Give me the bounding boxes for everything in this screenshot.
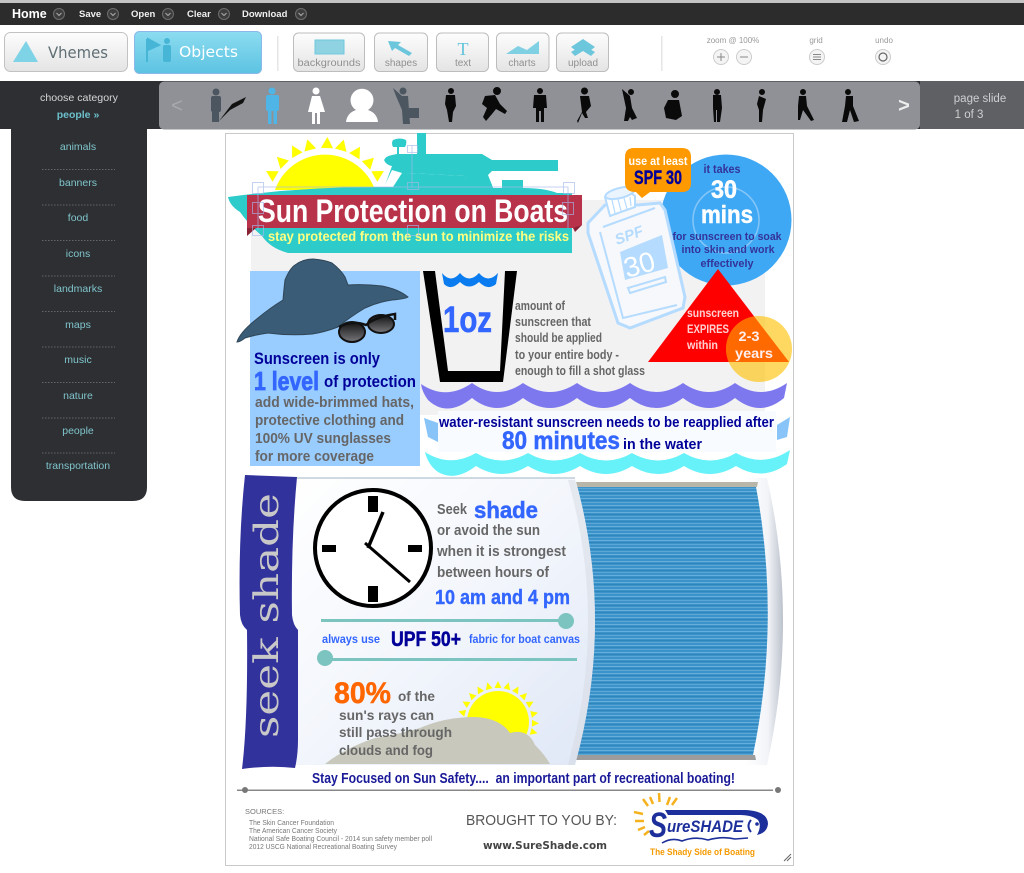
zoom grid undo controls: grid bbox=[809, 36, 823, 45]
panel: expiry triangle: EXPIRES bbox=[687, 322, 729, 336]
panel: sunscreen level: Sunscreen is only bbox=[254, 349, 380, 368]
panel: thirty minutes circle: into skin and work bbox=[682, 244, 775, 256]
closing message: Stay Focused on Sun Safety.... an important part of recreational boating! bbox=[312, 771, 735, 787]
SureShade logo: ureSHADE bbox=[667, 817, 744, 836]
category sidebar: landmarks bbox=[54, 283, 102, 295]
category strip: > bbox=[898, 95, 910, 117]
zoom grid undo controls: zoom @ 100% bbox=[707, 36, 759, 45]
category sidebar: music bbox=[64, 354, 92, 366]
panel: sunscreen level: 100% UV sunglasses bbox=[255, 430, 391, 447]
selection handles bbox=[252, 146, 574, 236]
purple wave bbox=[421, 383, 787, 409]
slider top bbox=[321, 613, 574, 629]
panel: one ounce shot glass bbox=[423, 271, 645, 382]
category sidebar: maps bbox=[65, 319, 91, 331]
category strip: people » bbox=[57, 109, 99, 121]
upload button: upload bbox=[568, 58, 598, 69]
website: www.SureShade.com bbox=[483, 839, 607, 852]
top menu bar bbox=[0, 0, 1024, 25]
upload button bbox=[556, 33, 608, 72]
panel: seek shade: clouds and fog bbox=[339, 742, 433, 758]
category strip: choose category bbox=[40, 92, 119, 104]
panel: seek shade: when it is strongest bbox=[436, 543, 566, 560]
Objects button: Objects bbox=[179, 43, 238, 61]
shapes button bbox=[374, 33, 428, 72]
panel: water resistant text: 80 minutes bbox=[502, 427, 620, 455]
top menu bar: Clear bbox=[187, 9, 211, 20]
text button: text bbox=[455, 58, 471, 69]
panel: seek shade: Seek bbox=[437, 501, 468, 518]
slider bottom bbox=[317, 650, 577, 666]
Objects button bbox=[134, 32, 262, 74]
panel: sunscreen level bbox=[237, 259, 420, 466]
top menu bar: Home bbox=[12, 7, 47, 21]
category sidebar: animals bbox=[60, 141, 96, 153]
panel: seek shade: sun's rays can bbox=[339, 707, 434, 723]
boat icon bbox=[228, 133, 572, 253]
sun icon bbox=[263, 137, 387, 190]
vertical banner bbox=[240, 475, 298, 769]
divider with end dots bbox=[237, 787, 781, 793]
cyan wave bbox=[425, 450, 790, 476]
fabric panel bbox=[575, 478, 783, 765]
panel: thirty minutes circle bbox=[660, 154, 792, 286]
sources: The Skin Cancer Foundation bbox=[249, 820, 334, 827]
panel: sunscreen level: for more coverage bbox=[255, 448, 374, 465]
icon: sunscreen bottle bbox=[588, 185, 685, 328]
text button bbox=[436, 33, 488, 72]
panel: thirty minutes circle: effectively bbox=[700, 258, 754, 270]
title banner: Sun Protection on Boats bbox=[258, 193, 568, 229]
icon: sun behind cloud bbox=[325, 681, 550, 764]
icon: sunscreen bottle: SPF bbox=[613, 223, 647, 249]
panel: thirty minutes circle: 30 bbox=[711, 176, 737, 204]
text button: T bbox=[458, 39, 468, 59]
category sidebar bbox=[11, 129, 147, 501]
top menu bar: Open bbox=[131, 9, 155, 20]
icon: sunglasses bbox=[339, 314, 395, 342]
callout: SPF 30 bbox=[625, 148, 691, 198]
panel: sunscreen level: protective clothing and bbox=[255, 412, 404, 429]
panel: seek shade bbox=[240, 475, 783, 769]
top menu bar: Save bbox=[79, 9, 101, 20]
zoom grid undo controls: undo bbox=[875, 36, 893, 45]
vertical banner: seek shade bbox=[247, 493, 287, 738]
panel: one ounce shot glass: 1oz bbox=[443, 299, 492, 340]
category sidebar: banners bbox=[59, 177, 97, 189]
Vhemes button bbox=[4, 32, 128, 72]
panel: sunscreen level: of protection bbox=[324, 372, 416, 391]
SureShade logo: S bbox=[649, 806, 667, 845]
panel: seek shade: 80% bbox=[334, 677, 391, 710]
object silhouettes bbox=[211, 87, 859, 124]
panel: water resistant text: in the water bbox=[623, 437, 702, 453]
panel: one ounce shot glass: sunscreen that bbox=[515, 315, 592, 329]
panel: sunscreen level: add wide-brimmed hats, bbox=[255, 394, 414, 411]
panel: seek shade: of the bbox=[398, 688, 435, 704]
panel: seek shade: still pass through bbox=[339, 724, 452, 740]
category strip: page slide bbox=[954, 93, 1006, 105]
icon: sunscreen bottle: 30 bbox=[620, 245, 659, 284]
subtitle: stay protected from the sun to minimize the risks bbox=[268, 229, 569, 244]
top menu bar: Download bbox=[242, 9, 288, 20]
category sidebar: icons bbox=[66, 248, 90, 260]
sources bbox=[245, 807, 432, 851]
shapes button: shapes bbox=[385, 58, 417, 69]
icon: clock bbox=[315, 490, 431, 606]
icon: water in glass bbox=[442, 273, 498, 287]
panel: seek shade: 10 am and 4 pm bbox=[435, 587, 570, 609]
panel: seek shade: always use bbox=[322, 632, 380, 646]
sources: 2012 USCG National Recreational Boating Survey bbox=[249, 844, 397, 851]
infographic canvas bbox=[226, 133, 794, 866]
SureShade logo bbox=[634, 793, 768, 858]
callout: SPF 30: use at least bbox=[628, 154, 688, 168]
panel: one ounce shot glass: should be applied bbox=[515, 331, 602, 345]
white shaded panel bbox=[285, 478, 595, 765]
charts button bbox=[496, 33, 549, 72]
panel: expiry triangle: sunscreen bbox=[687, 306, 739, 320]
brought to you by: BROUGHT TO YOU BY: bbox=[466, 812, 617, 829]
panel: sunscreen level: 1 level bbox=[254, 366, 319, 396]
panel: one ounce shot glass: enough to fill a shot glass bbox=[515, 364, 645, 378]
category sidebar: food bbox=[68, 212, 88, 224]
backgrounds button: backgrounds bbox=[298, 58, 360, 69]
callout: SPF 30: SPF 30 bbox=[634, 168, 682, 189]
panel: expiry triangle: within bbox=[686, 338, 718, 352]
panel: expiry triangle: years bbox=[735, 345, 773, 361]
toolbar bbox=[0, 25, 1024, 81]
SureShade logo: The Shady Side of Boating bbox=[650, 847, 755, 858]
sources: The American Cancer Society bbox=[249, 828, 337, 835]
category strip bbox=[0, 81, 1024, 130]
panel: seek shade: fabric for boat canvas bbox=[469, 632, 580, 646]
category strip: < bbox=[171, 95, 183, 117]
category sidebar: people bbox=[62, 425, 94, 437]
category sidebar: transportation bbox=[46, 460, 110, 472]
charts button: charts bbox=[508, 58, 536, 69]
panel: expiry triangle: 2-3 bbox=[738, 328, 760, 344]
panel: thirty minutes circle: for sunscreen to soak bbox=[672, 231, 782, 243]
panel: seek shade: shade bbox=[474, 497, 538, 523]
category strip: 1 of 3 bbox=[955, 109, 983, 121]
category sidebar: nature bbox=[63, 390, 93, 402]
zoom grid undo controls bbox=[707, 36, 893, 64]
backgrounds button bbox=[294, 33, 364, 72]
panel: one ounce shot glass: amount of bbox=[515, 299, 566, 313]
panel: thirty minutes circle: mins bbox=[701, 201, 753, 229]
panel: expiry triangle bbox=[648, 269, 792, 382]
Vhemes button: Vhemes bbox=[48, 43, 108, 62]
icon: shot glass bbox=[423, 271, 517, 382]
icon: sun hat bbox=[237, 259, 408, 342]
panel: seek shade: between hours of bbox=[437, 564, 550, 581]
panel: one ounce shot glass: to your entire body - bbox=[515, 348, 619, 362]
panel: thirty minutes circle: it takes bbox=[704, 164, 740, 176]
panel: seek shade: or avoid the sun bbox=[437, 522, 540, 539]
panel: seek shade: UPF 50+ bbox=[391, 628, 461, 651]
panel: water resistant text bbox=[424, 411, 790, 455]
sources: SOURCES: bbox=[245, 807, 284, 816]
panel: water resistant text: water-resistant sunscreen needs to be reapplied after bbox=[438, 415, 774, 431]
sources: National Safe Boating Council - 2014 sun safety member poll bbox=[249, 836, 432, 843]
